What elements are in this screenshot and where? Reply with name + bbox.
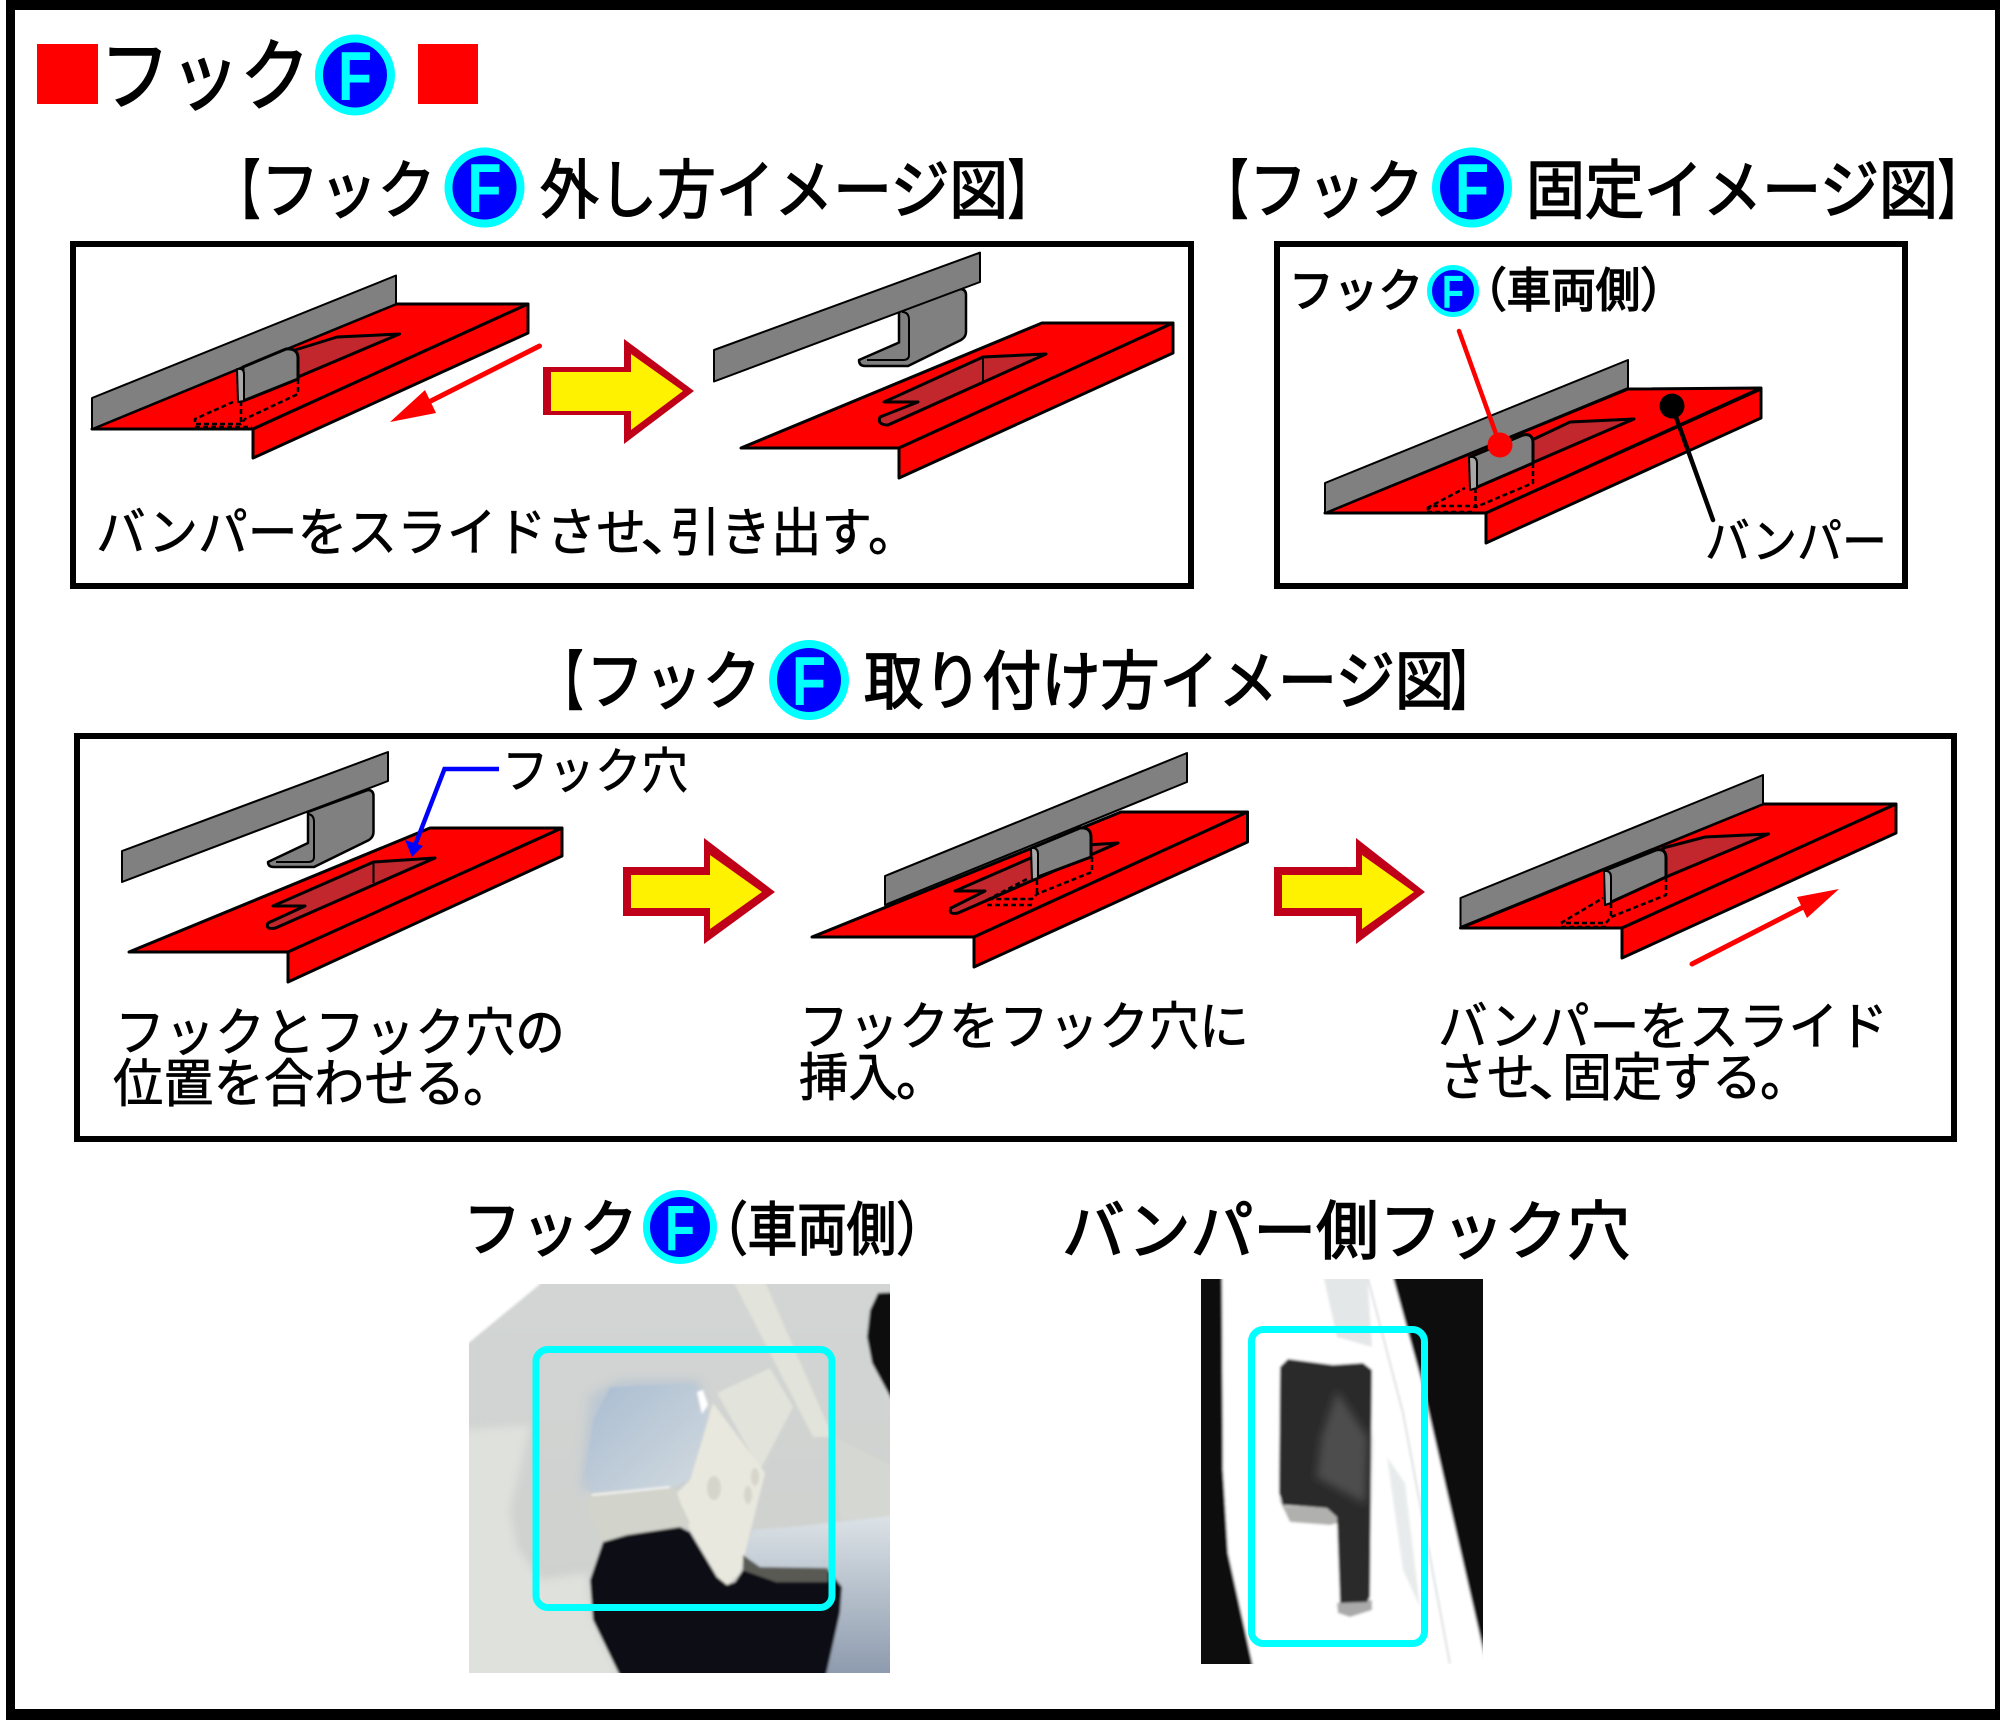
leader: hook — [1459, 331, 1512, 458]
diagram: hook fixed — [1325, 360, 1761, 543]
arrow: slide direction — [390, 346, 540, 422]
caption 2: フックをフック穴に — [799, 999, 1249, 1057]
caption 1 — [113, 1005, 565, 1114]
heading: fixed: 固定イメージ図 — [1526, 155, 1938, 227]
heading: removal: F — [468, 149, 502, 227]
icon: red square right — [418, 44, 478, 104]
heading: install: 【 — [543, 646, 583, 718]
caption 1: 位置を合わせる — [113, 1056, 465, 1114]
heading: install: 取り付け方イメージ図 — [864, 646, 1454, 718]
heading: install: フック — [586, 646, 761, 718]
heading: fixed: F — [1455, 149, 1489, 227]
heading: vehicle-side photo: F — [665, 1192, 695, 1264]
diagram: hook released — [714, 253, 1173, 478]
caption — [96, 505, 918, 563]
title text: フック — [100, 32, 310, 121]
caption 3: 固定する — [1562, 1050, 1762, 1108]
heading: removal — [218, 149, 1050, 227]
label: hook vehicle side: F — [1442, 266, 1464, 318]
arrow: step 1 — [623, 838, 775, 944]
badge F — [319, 37, 391, 115]
caption 2: 。 — [896, 1050, 946, 1108]
label: hook vehicle side: （車両側） — [1462, 264, 1685, 317]
caption 3: バンパーをスライド — [1438, 999, 1888, 1057]
diagram: insert — [812, 753, 1248, 967]
heading: vehicle-side photo: フック — [463, 1196, 638, 1265]
highlight: hole frame — [1252, 1330, 1424, 1644]
arrow: step — [543, 339, 694, 444]
caption 1: フックとフック穴の — [115, 1005, 565, 1063]
caption: 、 — [640, 505, 700, 563]
caption 1: 。 — [463, 1056, 513, 1114]
highlight: hook frame — [536, 1350, 832, 1608]
diagram: slide — [1460, 775, 1896, 958]
caption: 。 — [868, 505, 918, 563]
leader: bumper — [1660, 394, 1713, 520]
icon: red square left — [37, 44, 98, 104]
label: hook hole: フック穴 — [502, 745, 688, 799]
label: bumper: バンパー — [1705, 516, 1887, 569]
heading: install: F — [792, 642, 826, 720]
caption: 引き出す — [670, 505, 872, 563]
caption 3: 、 — [1527, 1050, 1597, 1108]
leader: hook hole — [405, 769, 499, 857]
caption: バンパーをスライドさせ — [96, 505, 646, 563]
title — [37, 32, 478, 121]
panel: install — [77, 736, 1954, 1139]
caption 2 — [799, 999, 1249, 1108]
caption 3 — [1438, 999, 1888, 1108]
arrow: slide direction — [1692, 889, 1839, 964]
badge F: F — [338, 37, 372, 115]
heading: vehicle-side photo — [463, 1192, 946, 1265]
heading: removal: フック — [261, 155, 436, 227]
heading: fixed — [1204, 149, 1980, 227]
arrow: step 2 — [1274, 838, 1425, 944]
diagram: align — [122, 752, 562, 982]
photo: hook — [460, 1275, 900, 1685]
label: hook vehicle side — [1289, 264, 1685, 318]
heading: fixed: 【 — [1204, 155, 1248, 227]
heading: fixed: フック — [1249, 155, 1424, 227]
panel: fixed — [1277, 244, 1905, 586]
heading: removal: 】 — [1008, 155, 1050, 227]
caption 3: 。 — [1760, 1050, 1810, 1108]
heading: vehicle-side photo: （車両側） — [698, 1198, 946, 1263]
heading: install: 】 — [1451, 646, 1489, 718]
caption 2: 挿入 — [799, 1050, 898, 1108]
label: hook vehicle side: フック — [1289, 265, 1423, 317]
photo: bumper hook hole — [1201, 1279, 1483, 1664]
heading: bumper-side photo: バンパー側フック穴 — [1062, 1196, 1630, 1268]
panel: removal — [73, 244, 1191, 586]
heading: install — [543, 642, 1489, 720]
diagram: hook engaged — [92, 276, 528, 458]
heading: removal: 【 — [218, 155, 260, 227]
heading: removal: 外し方イメージ図 — [540, 155, 1008, 227]
caption 3: させ — [1439, 1050, 1535, 1108]
